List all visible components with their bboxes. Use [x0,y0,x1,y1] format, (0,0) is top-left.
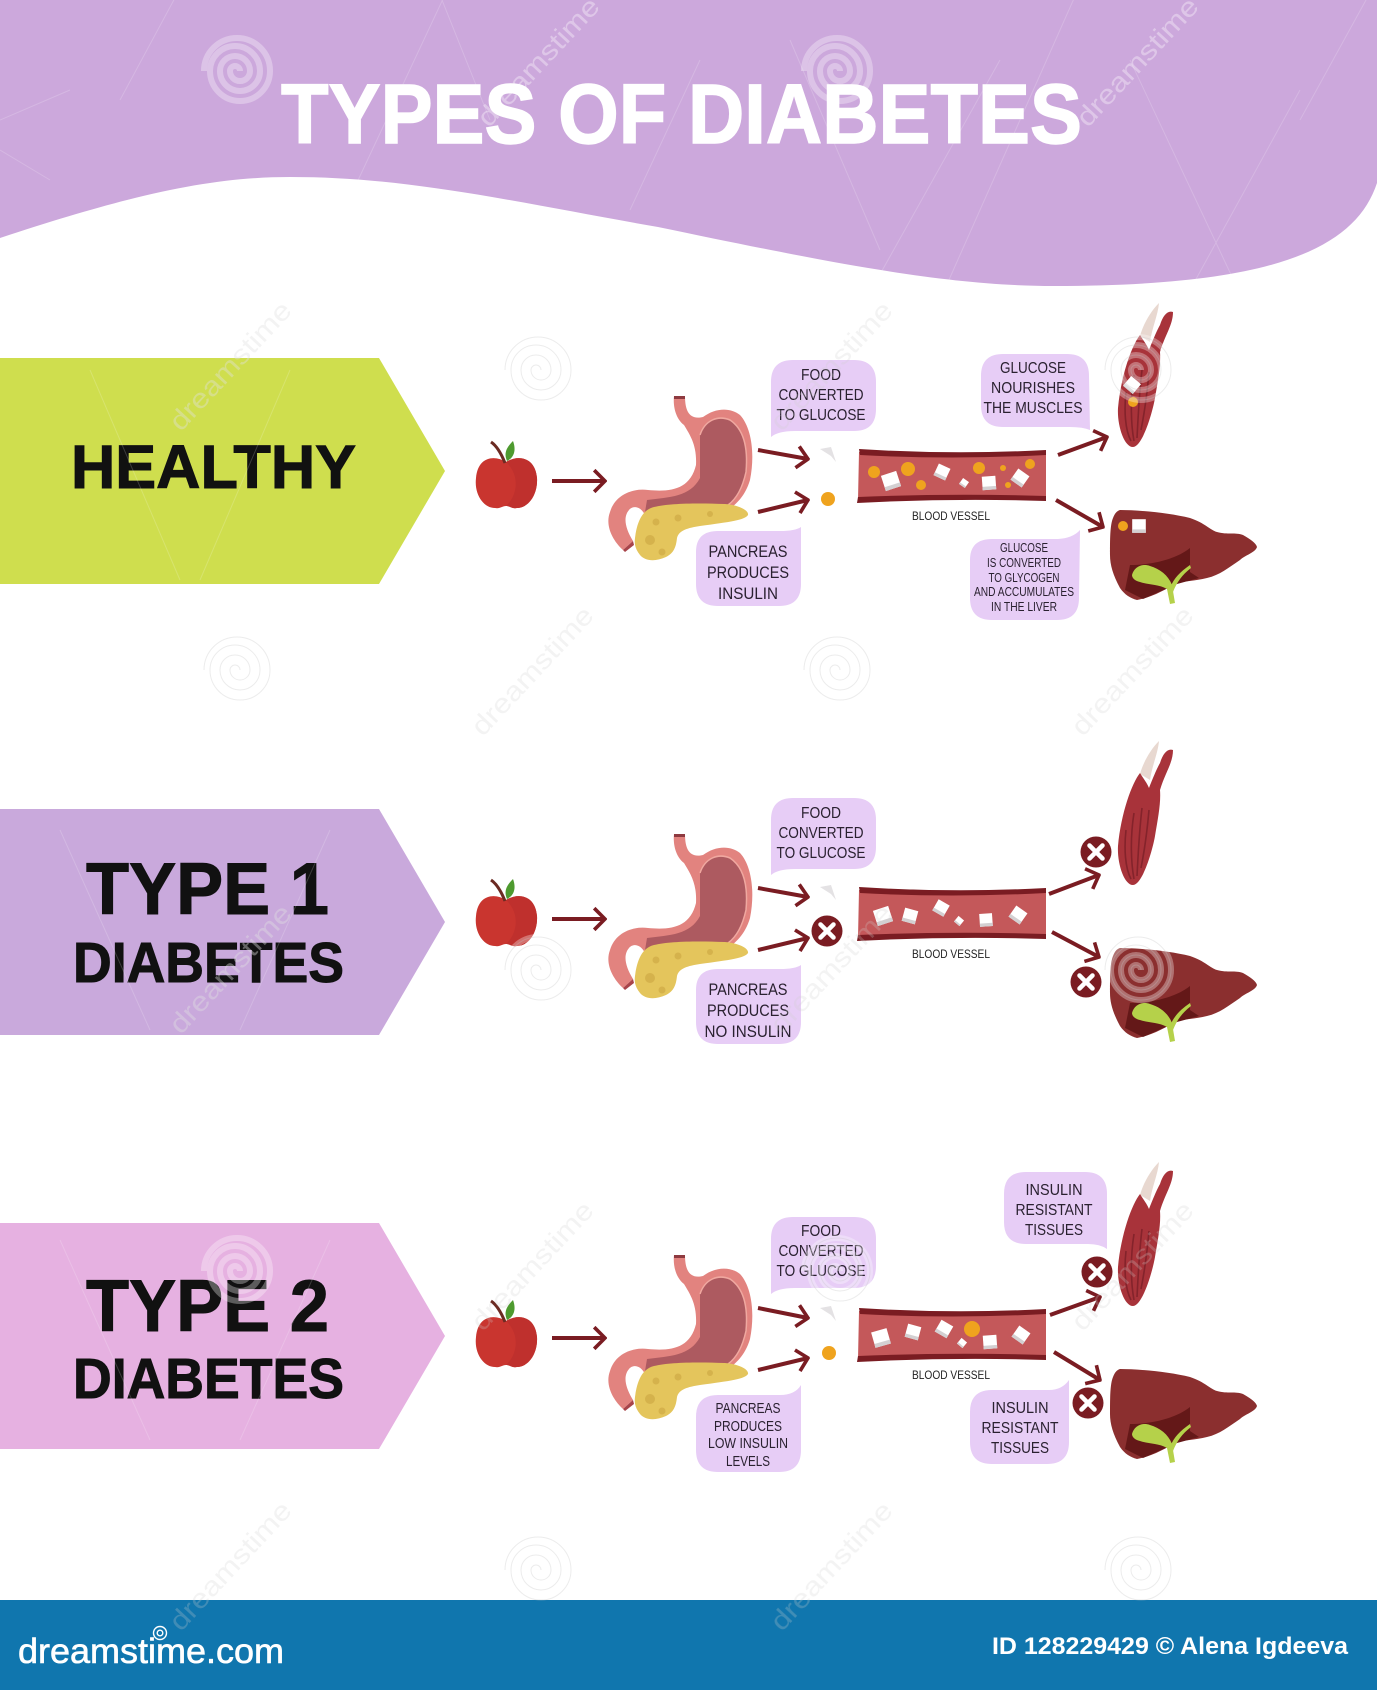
panel: type 1 label [0,809,445,1035]
icon: insulin dot [821,492,835,506]
icon: muscle [1118,741,1173,885]
icon: apple [476,441,537,508]
icon: no insulin cross [812,916,842,946]
panel: type 1 flow diagram [476,741,1257,1044]
icon: glucose cube [820,447,836,462]
callout: muscle insulin resistant tissues: TISSUES [1025,1222,1083,1239]
icon: muscle with glucose [1118,303,1173,447]
callout: food converted: TO GLUCOSE [776,845,866,862]
callout: pancreas produces insulin: PANCREAS [708,543,788,561]
callout: pancreas low insulin [696,1385,801,1472]
callout: pancreas produces no insulin [696,965,801,1044]
callout: liver insulin resistant tissues: TISSUES [991,1440,1049,1457]
panel: type 2 flow diagram [476,1162,1257,1472]
callout: glucose nourishes muscles: GLUCOSE [1000,360,1066,377]
arrow: to liver [1054,1352,1100,1380]
arrow: to liver [1056,500,1103,527]
watermark text: dreamstime [163,1495,298,1636]
label: blood vessel: BLOOD VESSEL [912,511,991,523]
watermark text: dreamstime [163,898,298,1039]
callout: liver insulin resistant tissues: INSULIN [992,1400,1048,1417]
icon: muscle cross [1080,836,1112,868]
callout: glucose converted to glycogen: IN THE LIVER [991,600,1057,614]
callout: glucose nourishes muscles [981,354,1090,430]
footer logo spiral [154,1626,166,1640]
callout: glucose nourishes muscles: THE MUSCLES [984,400,1082,417]
watermark text: dreamstime [1065,600,1200,741]
callout: pancreas produces no insulin: PANCREAS [708,981,788,999]
blood vessel with glucose only [857,887,1046,941]
arrow: stomach to glucose [758,1308,808,1318]
panel: type 2 label: TYPE 2 [86,1266,329,1347]
icon: muscle cross [1082,1256,1112,1288]
callout: glucose converted to glycogen: GLUCOSE [1000,541,1048,555]
icon: liver with glucose [1110,510,1257,604]
callout: food converted: TO GLUCOSE [776,1263,866,1280]
arrow: to muscle [1049,875,1099,894]
panel: type 1 label: TYPE 1 [86,849,329,930]
arrow: apple to stomach [552,917,605,921]
footer logo text: dreamstime.com [18,1632,284,1671]
panel: type 1 label: DIABETES [73,931,344,995]
blood vessel with glucose and insulin [857,449,1046,503]
arrow: to liver [1052,932,1099,957]
arrow: apple to stomach [552,1336,605,1340]
callout: muscle insulin resistant tissues: INSULIN [1026,1182,1082,1199]
callout: food converted: CONVERTED [778,387,864,404]
arrow: pancreas to insulin [758,500,808,512]
callout: food converted: FOOD [801,367,841,384]
title: TYPES OF DIABETES [281,67,1082,161]
icon: liver [1110,1369,1257,1463]
icon: apple [476,1300,537,1367]
watermark text: dreamstime [465,600,600,741]
callout: food converted: FOOD [801,805,841,822]
callout: food converted [771,798,876,875]
callout: glucose converted to glycogen: AND ACCUMULATES [974,585,1074,599]
arrow: pancreas to insulin [758,1358,808,1370]
callout: pancreas low insulin: PANCREAS [716,1401,780,1417]
callout: pancreas produces no insulin: PRODUCES [707,1002,789,1020]
callout: glucose converted to glycogen: IS CONVERTED [987,556,1061,570]
callout: liver insulin resistant tissues [970,1380,1069,1464]
icon: glucose cube [820,1306,836,1321]
icon: insulin dot [822,1346,836,1360]
icon: liver cross [1070,966,1102,998]
callout: glucose converted to glycogen [970,530,1080,620]
icon: apple [476,879,537,946]
arrow: apple to stomach [552,479,605,483]
watermark text: dreamstime [163,295,298,436]
blood vessel with glucose and little insulin [857,1308,1046,1362]
icon: stomach and pancreas [608,396,752,560]
callout: muscle insulin resistant tissues [1004,1172,1107,1249]
callout: glucose nourishes muscles: NOURISHES [991,380,1075,397]
watermark text: dreamstime [764,295,899,436]
header wave banner [0,0,1377,286]
label: blood vessel: BLOOD VESSEL [912,949,991,961]
panel: healthy label [0,358,445,584]
footer bar [0,1600,1377,1690]
arrow: to muscle [1050,1297,1100,1315]
panel: type 2 label: DIABETES [73,1347,344,1411]
panel: healthy label: HEALTHY [71,433,356,501]
watermark text: dreamstime [764,898,899,1039]
callout: food converted [771,360,876,437]
arrow: to muscle [1058,437,1107,455]
watermark text: dreamstime [764,1495,899,1636]
callout: pancreas low insulin: PRODUCES [714,1419,782,1435]
callout: muscle insulin resistant tissues: RESISTANT [1016,1202,1093,1219]
icon: liver cross [1072,1388,1104,1418]
footer credit: ID 128229429 © Alena Igdeeva [992,1633,1349,1660]
callout: food converted: FOOD [801,1223,841,1240]
callout: pancreas produces insulin [696,527,801,606]
callout: pancreas low insulin: LEVELS [726,1454,770,1470]
icon: stomach and pancreas [608,834,752,998]
arrow: stomach to glucose [758,888,808,897]
arrow: stomach to glucose [758,450,808,459]
callout: glucose converted to glycogen: TO GLYCOGEN [988,571,1060,585]
panel: type 2 label [0,1223,445,1449]
watermark text: dreamstime [1065,1195,1200,1336]
callout: pancreas produces no insulin: NO INSULIN [704,1023,792,1041]
callout: food converted [771,1217,876,1294]
callout: pancreas produces insulin: PRODUCES [707,564,789,582]
panel: healthy flow diagram [476,303,1257,620]
watermark text: dreamstime [1070,0,1205,132]
callout: liver insulin resistant tissues: RESISTANT [982,1420,1059,1437]
arrow: pancreas to no insulin [758,938,808,950]
watermark text: dreamstime [471,0,606,132]
callout: food converted: TO GLUCOSE [776,407,866,424]
icon: glucose cube [820,885,836,900]
callout: pancreas low insulin: LOW INSULIN [708,1436,788,1452]
icon: liver [1110,948,1257,1042]
callout: food converted: CONVERTED [778,825,864,842]
icon: stomach and pancreas [608,1255,752,1419]
callout: food converted: CONVERTED [778,1243,864,1260]
watermark text: dreamstime [465,1195,600,1336]
watermark text [163,0,1205,1636]
callout: pancreas produces insulin: INSULIN [718,585,778,603]
label: blood vessel: BLOOD VESSEL [912,1370,991,1382]
icon: muscle [1118,1162,1173,1306]
